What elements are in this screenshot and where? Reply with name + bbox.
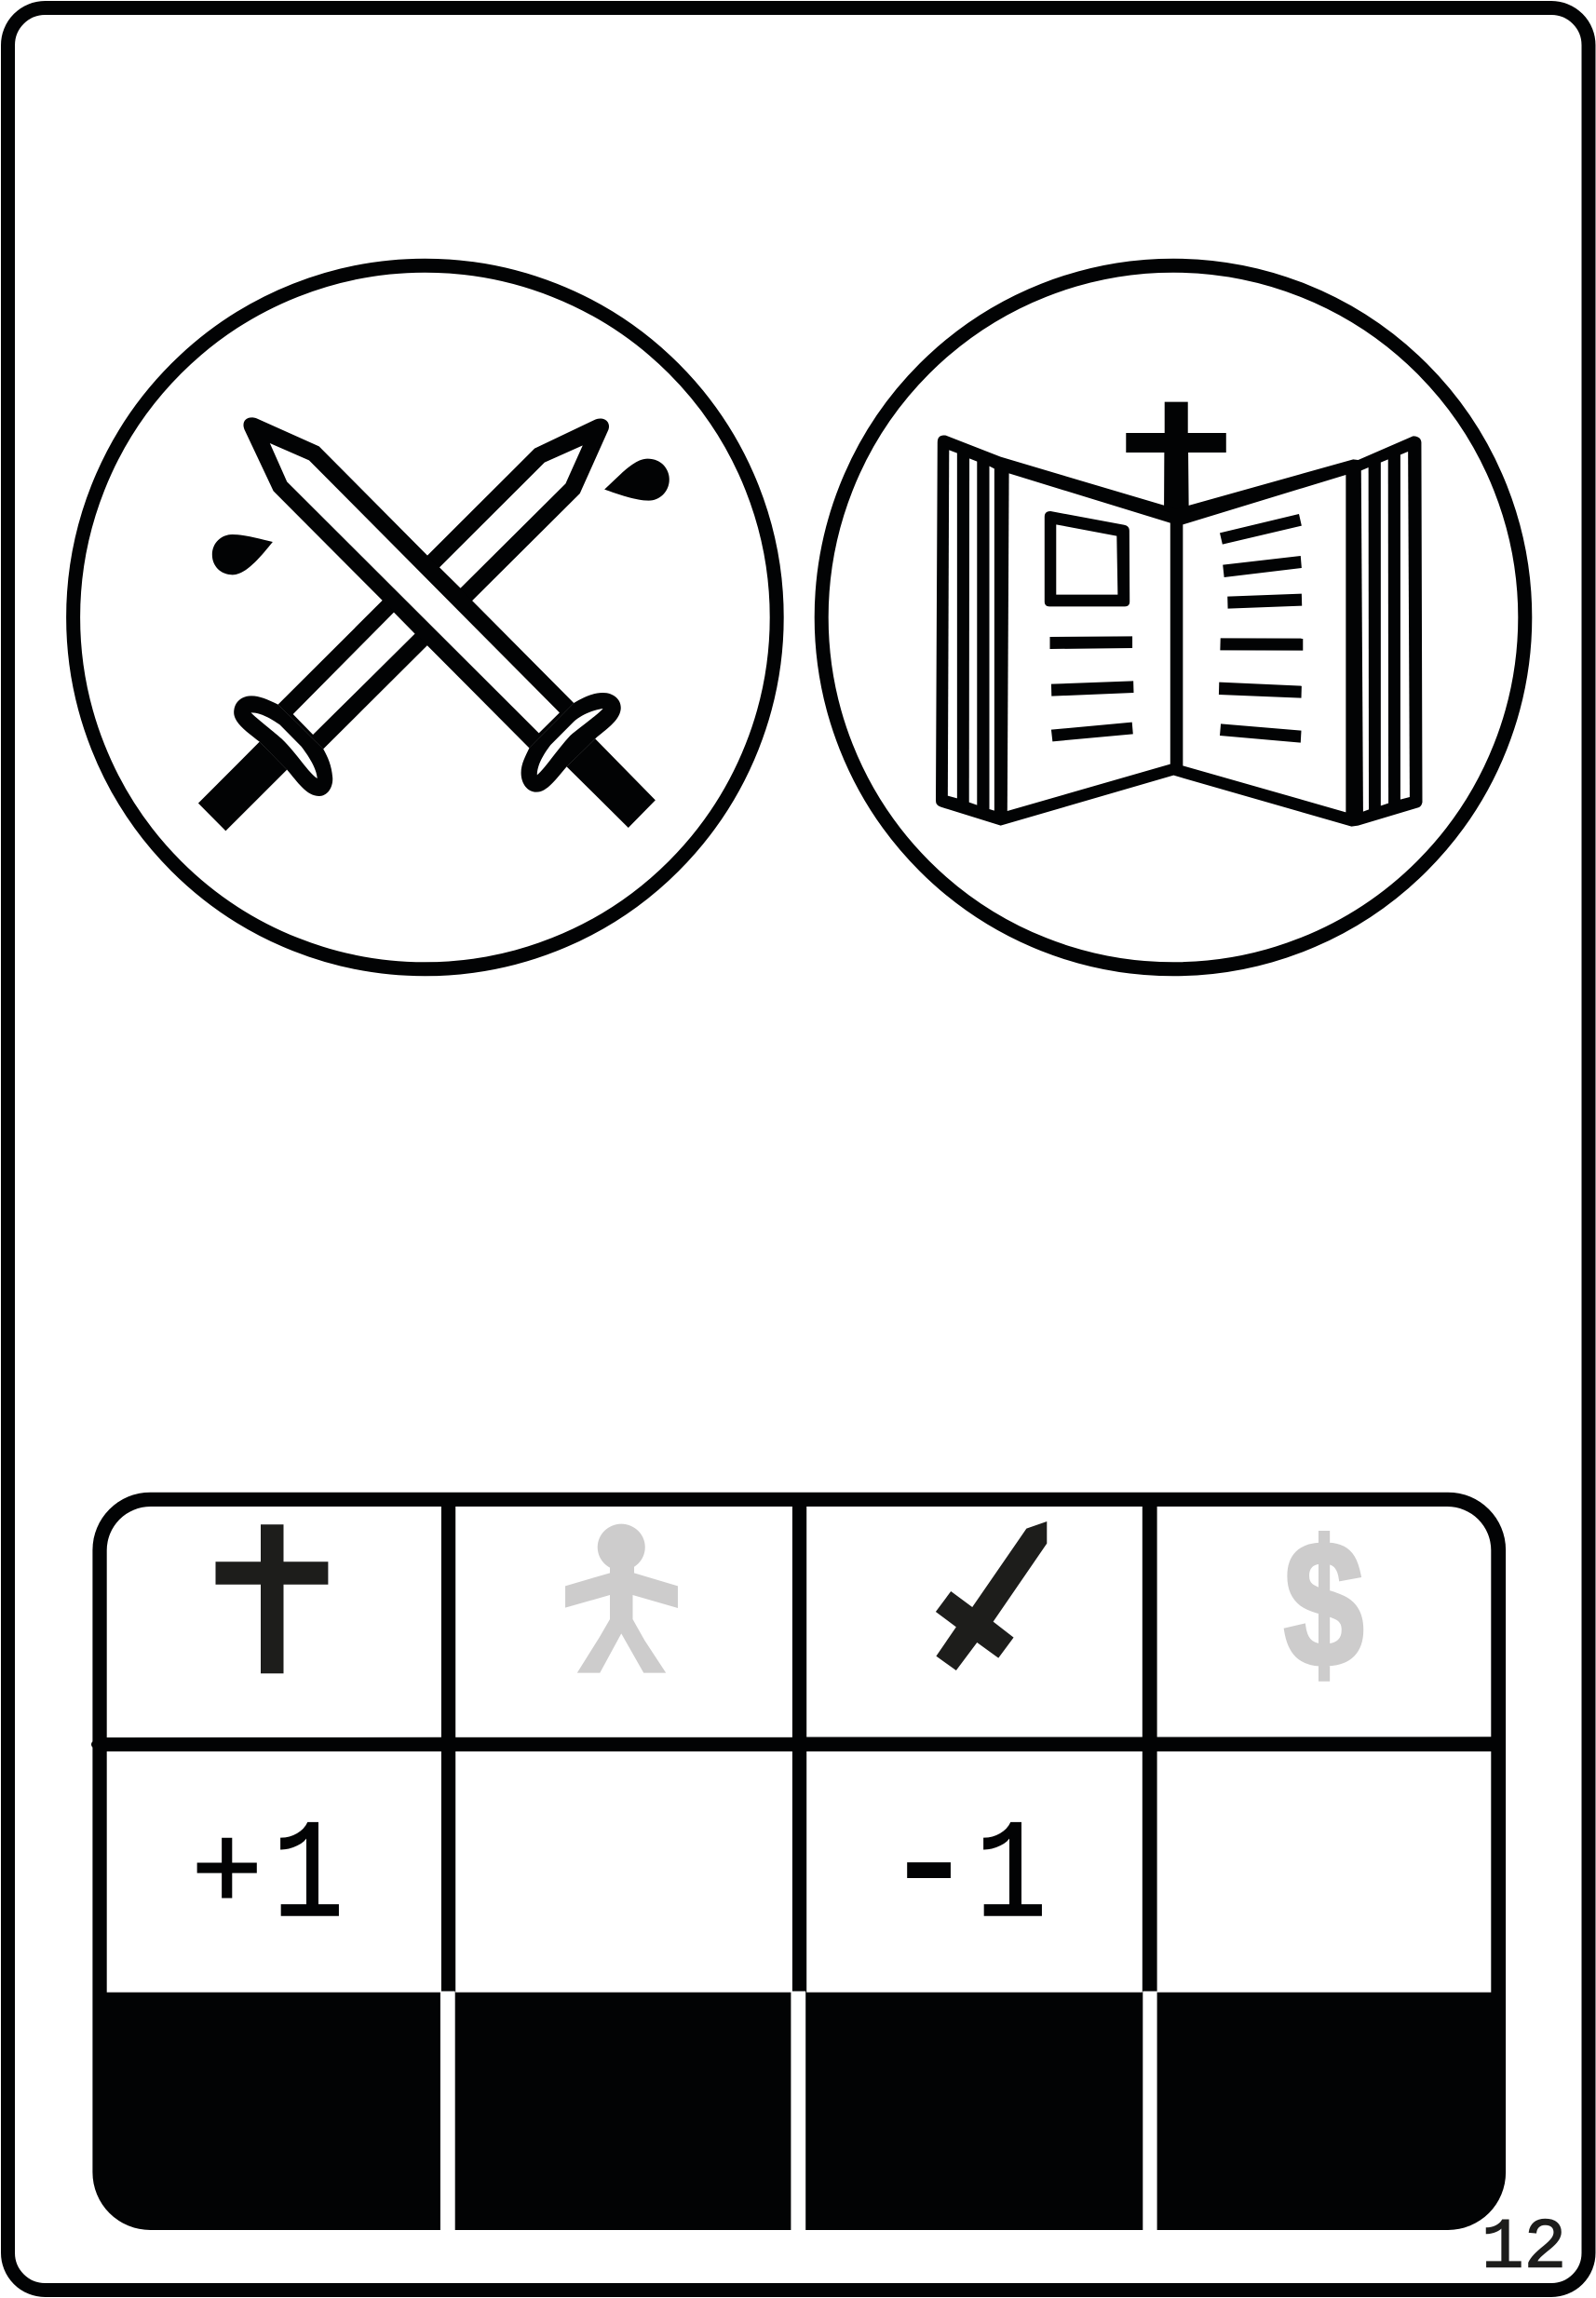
value: plus one — [191, 1799, 344, 1957]
icon: sword — [936, 1521, 1047, 1670]
value: plus one: 1 — [273, 1799, 344, 1957]
panel: stat table — [91, 1493, 1506, 2231]
value: plus one: + — [191, 1809, 263, 1944]
card number: 12 — [1481, 2208, 1566, 2288]
icon: right blood drop — [604, 459, 670, 501]
icon: open book with cross — [936, 402, 1422, 827]
icon: left blood drop — [212, 534, 273, 574]
icon: person — [565, 1524, 678, 1673]
icon: dollar sign: $ — [1284, 1505, 1363, 1704]
panel: holy book badge — [821, 265, 1525, 969]
value: minus one: - — [886, 1805, 972, 1936]
value: minus one — [886, 1799, 1047, 1957]
panel: crossed swords badge — [74, 265, 777, 969]
icon: crossed swords — [198, 417, 656, 831]
icon: faith cross — [216, 1524, 328, 1673]
value: minus one: 1 — [976, 1799, 1047, 1957]
